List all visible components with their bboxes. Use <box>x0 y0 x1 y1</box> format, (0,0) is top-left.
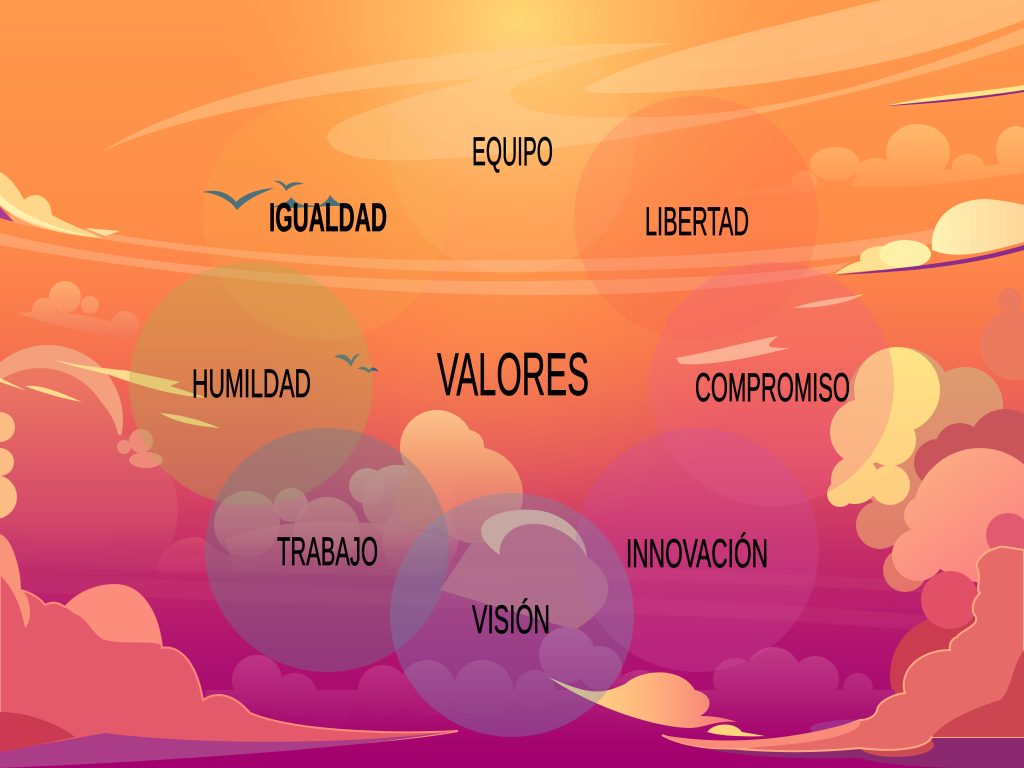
bird: behind label <box>273 195 345 208</box>
circle: vision <box>390 493 634 737</box>
right dark cloud <box>914 409 1024 500</box>
right back tan cloud <box>847 347 1003 592</box>
left edge peach lobes <box>0 412 17 519</box>
label: trabajo: TRABAJO <box>277 530 378 574</box>
large left cloud <box>0 345 178 595</box>
circle: innovacion <box>575 428 819 672</box>
circle: trabajo <box>205 428 449 672</box>
right yellow cloud <box>827 347 940 507</box>
yellow streaks right <box>676 294 864 364</box>
label: humildad: HUMILDAD <box>192 362 311 406</box>
purple bottom clouds <box>205 627 895 745</box>
bird: center left <box>334 354 360 367</box>
circle: equipo <box>390 30 634 274</box>
bottom left purple floor <box>0 731 455 768</box>
left small cloud <box>18 281 140 339</box>
yellow streaks left <box>0 360 220 428</box>
bird: large <box>203 188 274 210</box>
pale cloud behind trabajo <box>157 465 458 670</box>
right pink cloud <box>890 448 1024 738</box>
bird: small top <box>274 181 304 191</box>
wispy streaks upper sky <box>101 0 1024 160</box>
label: innovacion: INNOVACIÓN <box>626 531 768 576</box>
horizontal haze bands <box>0 545 1024 640</box>
label: vision: VISIÓN <box>472 597 550 642</box>
circle: igualdad <box>203 96 447 340</box>
circle: compromiso <box>650 262 894 506</box>
bright cloud right edge <box>835 199 1024 275</box>
center back clouds <box>395 410 523 543</box>
label: igualdad: IGUALDAD <box>269 196 387 240</box>
circle: libertad <box>574 96 818 340</box>
bird: center small <box>357 367 379 373</box>
bright cloud left edge <box>0 172 120 238</box>
title: valores: VALORES <box>437 341 589 408</box>
bottom center small yellow cloud <box>548 672 765 736</box>
bottom right cloud <box>662 547 1024 768</box>
center right cloud <box>440 510 608 630</box>
right top faint cloud <box>980 288 1024 380</box>
circle: humildad <box>129 262 373 506</box>
cloud top right <box>700 124 1024 196</box>
streak top right <box>885 85 1024 106</box>
label: equipo: EQUIPO <box>472 130 553 174</box>
bottom left cloud <box>0 535 458 755</box>
label: compromiso: COMPROMISO <box>695 366 850 410</box>
label: libertad: LIBERTAD <box>645 200 749 244</box>
wide arcs across the sky <box>0 212 940 295</box>
